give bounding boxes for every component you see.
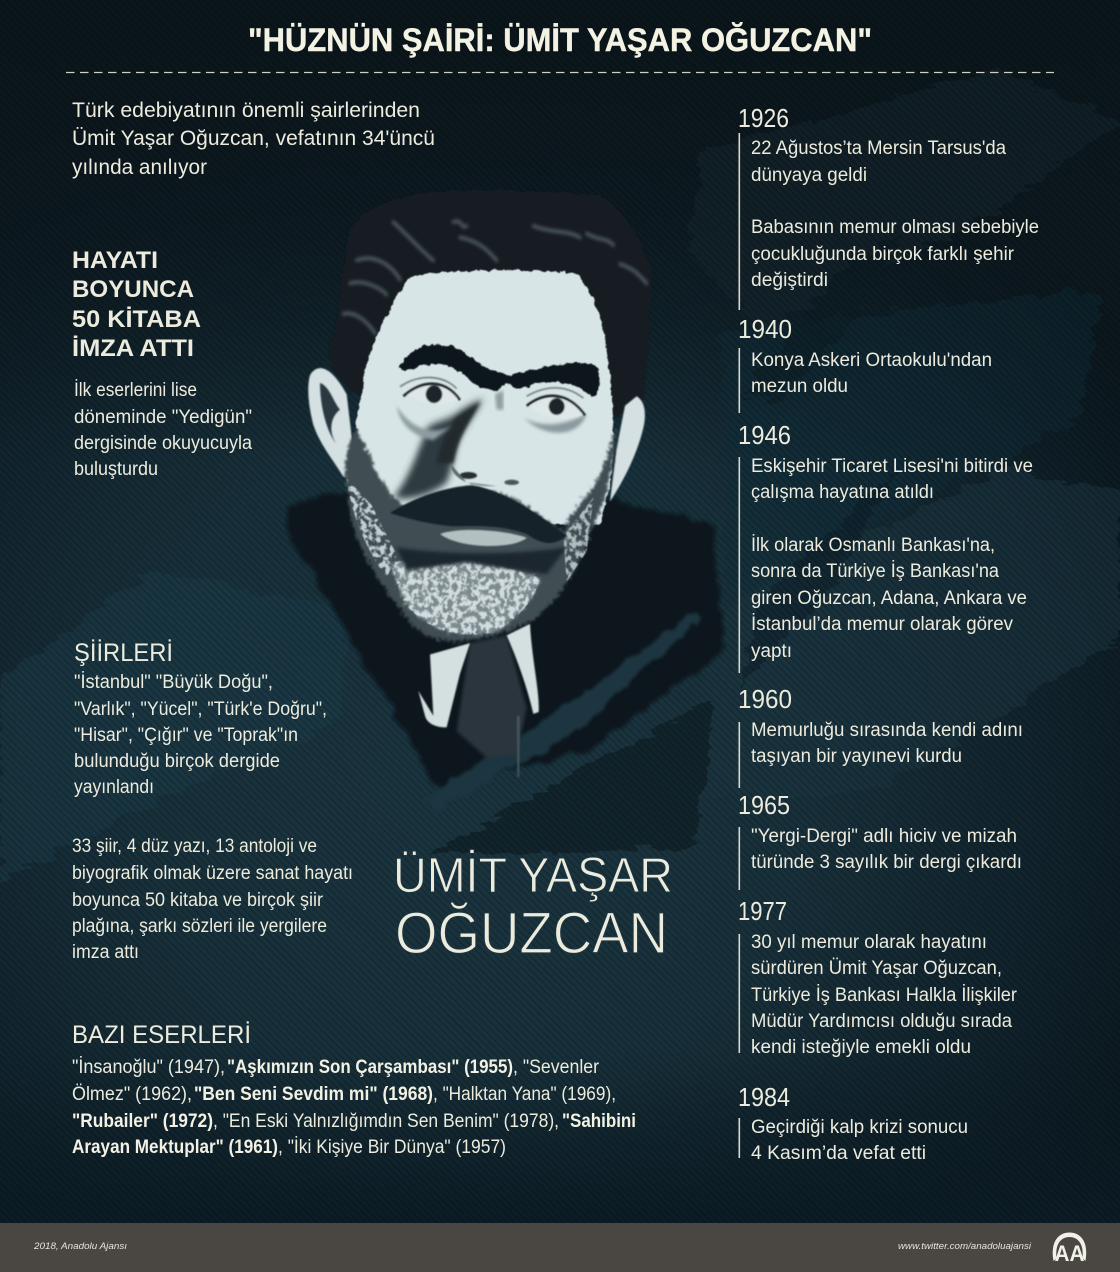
timeline entry 1946: 1946 bbox=[738, 420, 791, 450]
timeline entry 1960: Memurluğu sırasında kendi adını bbox=[751, 720, 1023, 741]
intro text: Türk edebiyatının önemli şairlerinden bbox=[72, 99, 420, 122]
poet name: ÜMİT YAŞAR bbox=[393, 849, 673, 903]
heading: 50 books: İMZA ATTI bbox=[72, 335, 194, 362]
text block: magazines: "Varlık", "Yücel", "Türk'e Doğru", bbox=[74, 699, 327, 720]
jacket bbox=[288, 490, 725, 810]
timeline entry 1946: çalışma hayatına atıldı bbox=[751, 482, 934, 503]
timeline entry 1965: türünde 3 sayılık bir dergi çıkardı bbox=[751, 852, 1022, 873]
timeline entry 1977: kendi isteğiyle emekli oldu bbox=[751, 1037, 971, 1058]
timeline entry 1926: çocukluğunda birçok farklı şehir bbox=[751, 244, 1015, 265]
timeline entry 1926: 1926 bbox=[738, 103, 789, 133]
text block: first works: buluşturdu bbox=[74, 459, 158, 480]
brows bbox=[398, 344, 599, 397]
icon: Anadolu Agency logo: AA bbox=[1054, 1241, 1085, 1266]
timeline entry 1946: sonra da Türkiye İş Bankası'na bbox=[751, 561, 999, 582]
beard bbox=[345, 425, 617, 641]
text block: output summary: biyografik olmak üzere sanat hayatı bbox=[72, 863, 353, 884]
text block: first works: dergisinde okuyucuyla bbox=[74, 433, 252, 454]
timeline entry 1940: 1940 bbox=[738, 314, 792, 344]
text block: works list: , "İki Kişiye Bir Dünya" (1957) bbox=[278, 1137, 506, 1158]
timeline entry 1940: Konya Askeri Ortaokulu'ndan bbox=[751, 350, 992, 371]
timeline entry 1960: taşıyan bir yayınevi kurdu bbox=[751, 746, 962, 767]
timeline entry 1940: mezun oldu bbox=[751, 376, 848, 397]
text block: works list: , "Halktan Yana" (1969), bbox=[433, 1084, 616, 1105]
text block: works list: Arayan Mektuplar" (1961) bbox=[72, 1137, 278, 1158]
timeline entry 1946: İstanbul’da memur olarak görev bbox=[751, 614, 1013, 635]
ears bbox=[308, 368, 645, 501]
main title: "HÜZNÜN ŞAİRİ: ÜMİT YAŞAR OĞUZCAN" bbox=[248, 22, 872, 58]
text block: works list: , "En Eski Yalnızlığımdın Sen Benim" (1978), bbox=[213, 1111, 559, 1132]
text block: works list: , "Sevenler bbox=[513, 1057, 600, 1078]
timeline entry 1977: Müdür Yardımcısı olduğu sırada bbox=[751, 1011, 1012, 1032]
timeline entry 1926: Babasının memur olması sebebiyle bbox=[751, 217, 1039, 238]
text block: works list: "Rubailer" (1972) bbox=[72, 1111, 213, 1132]
text block: magazines: "İstanbul" "Büyük Doğu", bbox=[74, 672, 273, 693]
footer bar bbox=[0, 1223, 1120, 1272]
text block: works list: "Aşkımızın Son Çarşambası" (1955) bbox=[227, 1057, 513, 1078]
text block: works list: "Ben Seni Sevdim mi" (1968) bbox=[194, 1084, 433, 1105]
shirt collar and tie bbox=[418, 624, 539, 777]
text block: magazines: bulunduğu birçok dergide bbox=[74, 751, 280, 772]
nose bbox=[450, 463, 519, 486]
timeline entry 1977: sürdüren Ümit Yaşar Oğuzcan, bbox=[751, 958, 1002, 979]
timeline entry 1946: yaptı bbox=[751, 641, 792, 662]
timeline entry 1926: dünyaya geldi bbox=[751, 165, 867, 186]
timeline entry 1977: 1977 bbox=[738, 896, 787, 926]
timeline entry 1946 bbox=[738, 420, 1033, 673]
timeline entry 1940 bbox=[738, 314, 992, 413]
heading: 50 books: BOYUNCA bbox=[72, 276, 194, 303]
eyes bbox=[400, 378, 585, 418]
timeline entry 1984: 4 Kasım’da vefat etti bbox=[751, 1143, 926, 1164]
footer credit: 2018, Anadolu Ajansı bbox=[33, 1241, 127, 1252]
timeline entry 1977: 30 yıl memur olarak hayatını bbox=[751, 932, 987, 953]
timeline entry 1946: giren Oğuzcan, Adana, Ankara ve bbox=[751, 588, 1027, 609]
intro text bbox=[72, 99, 435, 179]
heading: poems: ŞİİRLERİ bbox=[74, 638, 173, 667]
timeline entry 1965: 1965 bbox=[738, 790, 790, 820]
heading: 50 books: HAYATI bbox=[72, 247, 158, 274]
text block: works list: "Sahibini bbox=[562, 1111, 636, 1132]
timeline entry 1977 bbox=[738, 896, 1018, 1058]
heading: 50 books bbox=[72, 247, 201, 362]
hair and head, drawn in zoomed coordinates bbox=[308, 190, 652, 777]
text block: works list bbox=[72, 1057, 636, 1158]
poet name: OĞUZCAN bbox=[395, 901, 668, 966]
text block: magazines: "Hisar", "Çığır" ve "Toprak"ın bbox=[74, 725, 298, 746]
text block: output summary: imza attı bbox=[72, 942, 139, 963]
timeline entry 1946: Eskişehir Ticaret Lisesi'ni bitirdi ve bbox=[751, 456, 1033, 477]
heading: 50 books: 50 KİTABA bbox=[72, 306, 201, 333]
text block: first works bbox=[74, 380, 252, 480]
timeline entry 1960 bbox=[738, 684, 1023, 788]
timeline entry 1960: 1960 bbox=[738, 684, 792, 714]
text block: output summary: plağına, şarkı sözleri ile yergilere bbox=[72, 916, 327, 937]
mustache and lip bbox=[390, 485, 567, 546]
timeline entry 1946: İlk olarak Osmanlı Bankası'na, bbox=[751, 535, 995, 556]
text block: output summary: boyunca 50 kitaba ve birçok şiir bbox=[72, 890, 324, 911]
timeline entry 1965 bbox=[738, 790, 1022, 890]
timeline bbox=[738, 103, 1039, 1164]
timeline entry 1926: değiştirdi bbox=[751, 270, 828, 291]
text block: first works: İlk eserlerini lise bbox=[74, 380, 197, 401]
text block: output summary bbox=[72, 836, 353, 963]
timeline entry 1984: Geçirdiği kalp krizi sonucu bbox=[751, 1117, 968, 1138]
face bbox=[355, 270, 613, 524]
intro text: Ümit Yaşar Oğuzcan, vefatının 34'üncü bbox=[72, 127, 435, 150]
text block: works list: Ölmez" (1962), bbox=[72, 1084, 192, 1105]
timeline entry 1926 bbox=[738, 103, 1039, 310]
text block: first works: döneminde "Yedigün" bbox=[74, 407, 252, 428]
timeline entry 1984: 1984 bbox=[738, 1082, 790, 1112]
text block: magazines: yayınlandı bbox=[74, 777, 154, 798]
text block: works list: "İnsanoğlu" (1947), bbox=[72, 1057, 225, 1078]
portrait of Ümit Yaşar Oğuzcan bbox=[288, 190, 725, 810]
text block: output summary: 33 şiir, 4 düz yazı, 13 antoloji ve bbox=[72, 836, 317, 857]
timeline entry 1977: Türkiye İş Bankası Halkla İlişkiler bbox=[751, 985, 1018, 1006]
timeline entry 1984 bbox=[738, 1082, 968, 1164]
intro text: yılında anılıyor bbox=[72, 156, 207, 179]
face shading bbox=[393, 390, 587, 499]
heading: selected works: BAZI ESERLERİ bbox=[72, 1020, 251, 1049]
dashed divider bbox=[66, 72, 1054, 74]
timeline entry 1965: "Yergi-Dergi" adlı hiciv ve mizah bbox=[751, 826, 1017, 847]
footer twitter link: www.twitter.com/anadoluajansi bbox=[898, 1241, 1032, 1252]
text block: magazines bbox=[74, 672, 327, 798]
poet name bbox=[393, 849, 673, 966]
timeline entry 1926: 22 Ağustos’ta Mersin Tarsus'da bbox=[751, 138, 1006, 159]
hair bbox=[330, 190, 652, 417]
